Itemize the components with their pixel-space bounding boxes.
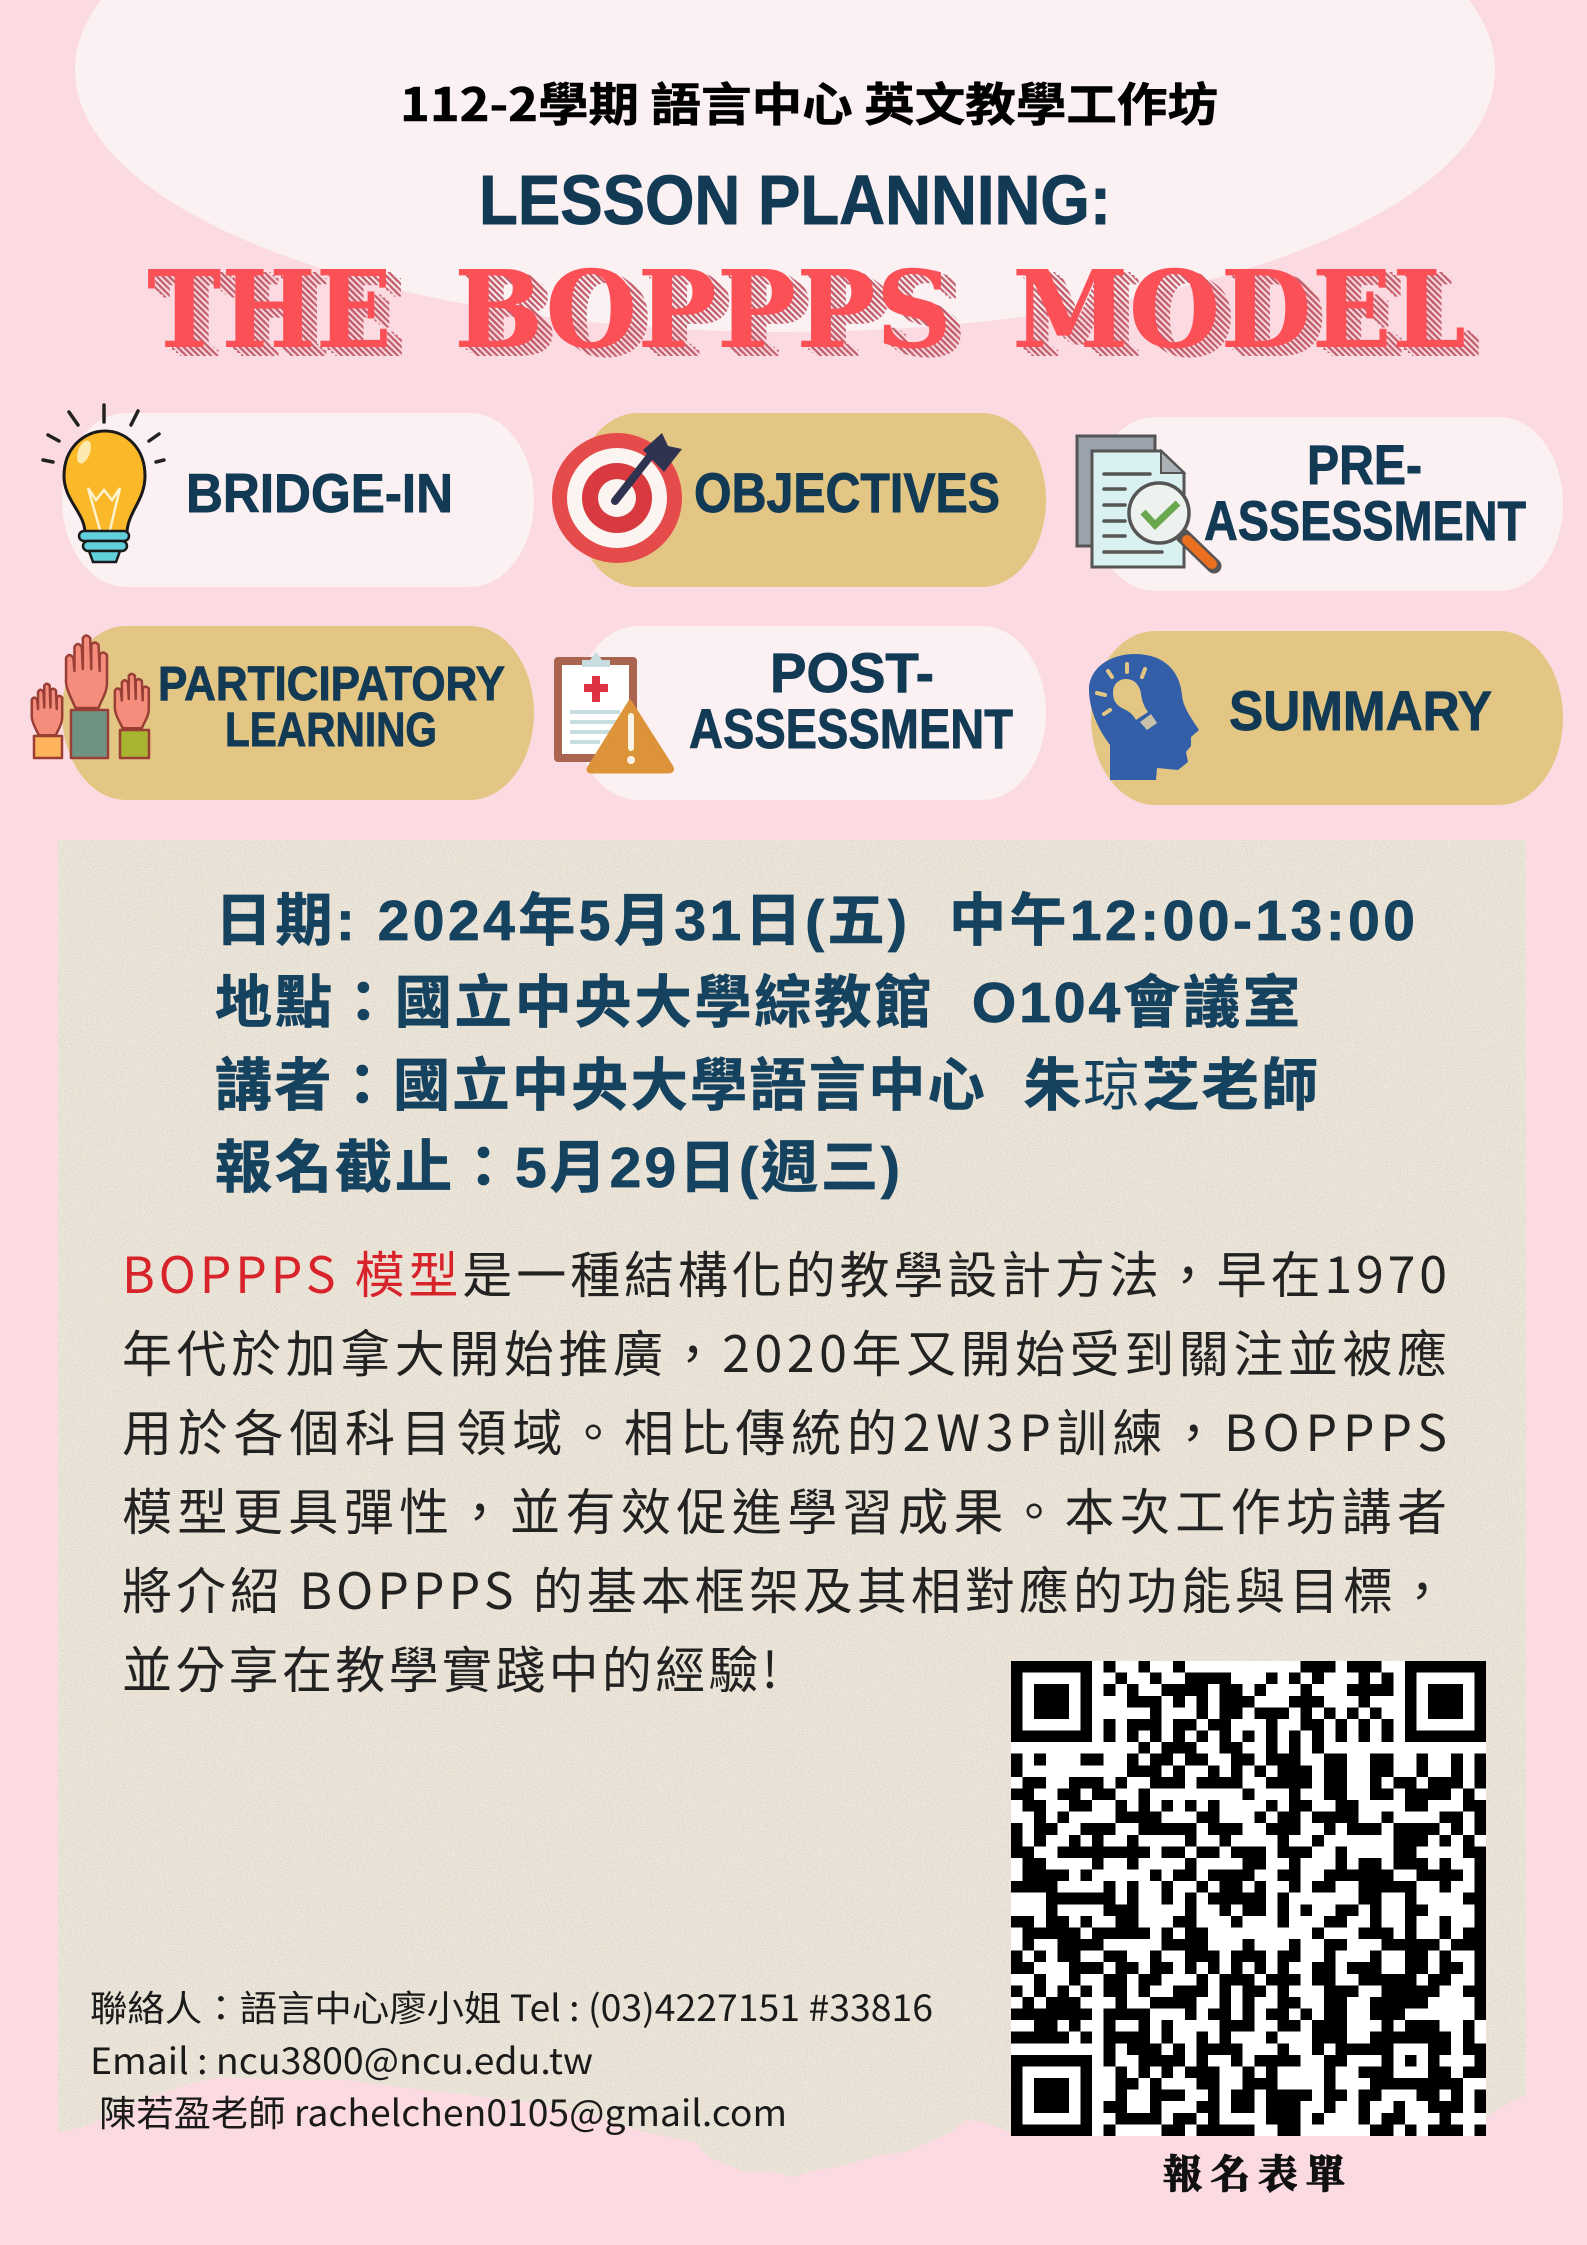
text block: contact: 聯絡人：語言中心廖小姐 Tel : (03)4227151 #33816 — [90, 1980, 933, 2032]
icon: target with dart — [552, 433, 682, 563]
header ellipse — [75, 0, 1495, 332]
title: the BOPPPS model: MODEL — [1023, 254, 1477, 379]
text block: description — [122, 1236, 1447, 1703]
title: the BOPPPS model: THE — [158, 254, 403, 379]
panel: torn paper — [58, 840, 1526, 2177]
title: the BOPPPS model: THE — [162, 257, 407, 382]
text block: description: 年代於加拿大開始推廣，2020年又開始受到關注並被應 — [122, 1315, 1447, 1387]
QR code — [1011, 1661, 1486, 2136]
heading: lesson planning: LESSON PLANNING: — [479, 161, 1111, 239]
label: post-assessment: POST- — [770, 641, 934, 704]
label: participatory learning: PARTICIPATORY — [158, 658, 505, 711]
text block: contact: 陳若盈老師 rachelchen0105@gmail.com — [99, 2085, 787, 2137]
title: the BOPPPS model: THE — [147, 248, 392, 373]
text block: description: 用於各個科目領域。相比傳統的2W3P訓練，BOPPPS — [122, 1394, 1447, 1466]
text block: description: BOPPPS 模型是一種結構化的教學設計方法，早在1970 — [122, 1236, 1447, 1308]
text block: contact: Email : ncu3800@ncu.edu.tw — [90, 2033, 593, 2085]
icon: documents and magnifier — [1077, 436, 1214, 567]
info: venue: 地點：國立中央大學綜教館 O104會議室 — [215, 971, 1300, 1035]
info: date: 日期: 2024年5月31日(五) 中午12:00-13:00 — [215, 889, 1415, 953]
pill: bridge-in — [43, 405, 534, 587]
label: pre-assessment — [1204, 433, 1526, 552]
pill: objectives — [552, 413, 1046, 587]
title: the BOPPPS model — [147, 248, 1481, 382]
icon: raised hands — [32, 636, 149, 758]
label: post-assessment — [689, 641, 1013, 760]
text block: contact — [90, 1980, 933, 2137]
title: the BOPPPS model: THE — [154, 251, 399, 376]
pill: pre-assessment — [1077, 417, 1563, 591]
title: the BOPPPS model: MODEL — [1012, 248, 1466, 373]
label: pre-assessment: ASSESSMENT — [1204, 489, 1526, 552]
label: pre-assessment: PRE- — [1307, 433, 1422, 496]
pill: post-assessment — [554, 626, 1046, 800]
QR caption: registration form: 報名表單 — [1163, 2144, 1345, 2200]
text block: description: 模型更具彈性，並有效促進學習成果。本次工作坊講者 — [122, 1473, 1447, 1545]
text block: description: 將介紹 BOPPPS 的基本框架及其相對應的功能與目標， — [122, 1552, 1447, 1624]
label: summary: SUMMARY — [1229, 679, 1492, 742]
title: the BOPPPS model: MODEL — [1027, 257, 1481, 382]
title: the BOPPPS model: BOPPPS — [465, 254, 963, 379]
label: participatory learning — [158, 658, 505, 757]
info: deadline: 報名截止：5月29日(週三) — [215, 1136, 900, 1200]
icon: head with idea bulb — [1089, 654, 1199, 780]
info: speaker: 講者：國立中央大學語言中心 朱琼芝老師 — [215, 1054, 1318, 1118]
title: the BOPPPS model: BOPPPS — [469, 257, 967, 382]
title: the BOPPPS model: BOPPPS — [461, 251, 959, 376]
icon: light bulb — [43, 405, 164, 562]
pill: summary — [1089, 631, 1563, 805]
label: post-assessment: ASSESSMENT — [689, 697, 1013, 760]
icon: clipboard and warning — [554, 652, 672, 772]
label: bridge-in: BRIDGE-IN — [186, 462, 453, 524]
title: the BOPPPS model: MODEL — [1019, 251, 1473, 376]
pill: participatory learning — [32, 626, 534, 800]
label: objectives: OBJECTIVES — [694, 461, 1000, 524]
subtitle: semester and workshop name: 112-2學期 語言中心 英文教學工作坊 — [400, 69, 1218, 135]
title: the BOPPPS model: BOPPPS — [454, 248, 952, 373]
label: participatory learning: LEARNING — [225, 704, 437, 757]
text block: description: 並分享在教學實踐中的經驗! — [122, 1631, 778, 1703]
